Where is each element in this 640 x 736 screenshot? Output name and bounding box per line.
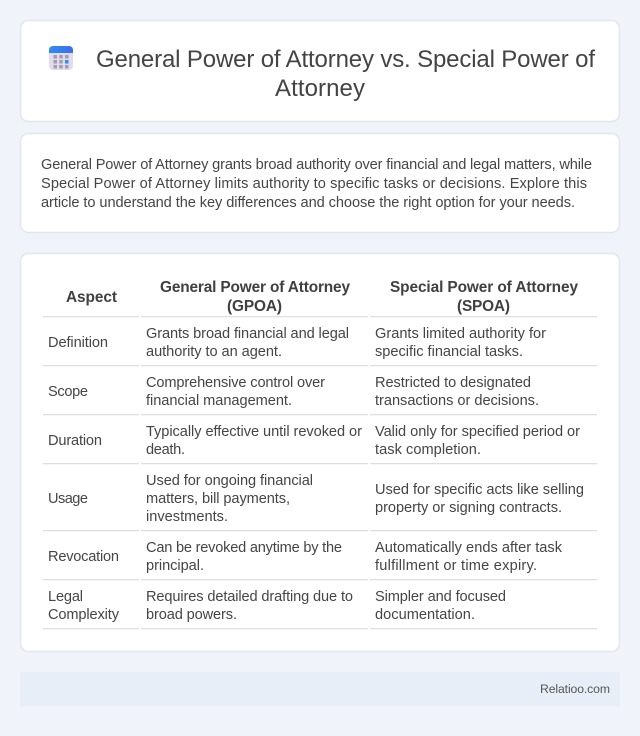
intro text: Special Power of Attorney limits authority to specific tasks or decisions. Explore this: [41, 176, 587, 192]
title: [96, 46, 595, 102]
panel: comparison table: [20, 254, 620, 652]
row: legal complexity: Complexity: [48, 607, 120, 623]
table header: (SPOA): [457, 298, 510, 315]
row: legal complexity: documentation.: [375, 607, 475, 623]
row: scope: Scope: [48, 384, 88, 400]
row: usage: Usage: [48, 491, 88, 507]
row: legal complexity: Simpler and focused: [375, 589, 506, 605]
row: duration: task completion.: [375, 442, 481, 458]
row: revocation: [43, 540, 597, 580]
row: revocation: Can be revoked anytime by the: [146, 540, 342, 556]
intro text: General Power of Attorney grants broad authority over financial and legal matters, while: [41, 157, 592, 173]
row: usage: Used for ongoing financial: [146, 473, 313, 489]
row: legal complexity: broad powers.: [146, 607, 237, 623]
row: definition: Grants broad financial and legal: [146, 326, 349, 342]
title: General Power of Attorney vs. Special Power of: [96, 46, 595, 73]
row: duration: Valid only for specified period or: [375, 424, 580, 440]
row: duration: Typically effective until revoked or: [146, 424, 362, 440]
footer: Relatioo.com: [540, 682, 610, 696]
row: scope: Comprehensive control over: [146, 375, 325, 391]
table header: Special Power of Attorney: [390, 279, 578, 296]
row: usage: Used for specific acts like selling: [375, 482, 584, 498]
table header: Aspect: [66, 289, 117, 306]
intro text: article to understand the key differences and choose the right option for your needs.: [41, 195, 575, 211]
icon: calendar: [49, 46, 73, 70]
row: usage: property or signing contracts.: [375, 500, 562, 516]
row: usage: matters, bill payments,: [146, 491, 290, 507]
row: definition: Definition: [48, 335, 108, 351]
row: duration: death.: [146, 442, 185, 458]
panel: title card: [20, 20, 620, 122]
row: definition: authority to an agent.: [146, 344, 282, 360]
table header: (GPOA): [227, 298, 282, 315]
row: scope: [43, 375, 597, 415]
row: revocation: fulfillment or time expiry.: [375, 558, 537, 574]
row: duration: Duration: [48, 433, 102, 449]
row: revocation: Automatically ends after task: [375, 540, 563, 556]
row: duration: [43, 424, 597, 464]
row: revocation: Revocation: [48, 549, 119, 565]
row: definition: specific financial tasks.: [375, 344, 523, 360]
row: scope: Restricted to designated: [375, 375, 531, 391]
intro text: [41, 157, 592, 211]
title: Attorney: [275, 75, 365, 102]
row: revocation: principal.: [146, 558, 204, 574]
row: usage: investments.: [146, 509, 228, 525]
row: usage: [43, 473, 597, 531]
row: legal complexity: Requires detailed drafting due to: [146, 589, 353, 605]
row: scope: transactions or decisions.: [375, 393, 539, 409]
panel: introduction: [20, 134, 620, 232]
footer: [20, 672, 620, 706]
row: scope: financial management.: [146, 393, 292, 409]
row: legal complexity: [43, 589, 597, 629]
table header: General Power of Attorney: [160, 279, 350, 296]
row: definition: [43, 326, 597, 366]
row: legal complexity: Legal: [48, 589, 83, 605]
row: definition: Grants limited authority for: [375, 326, 546, 342]
table header: [43, 279, 597, 317]
